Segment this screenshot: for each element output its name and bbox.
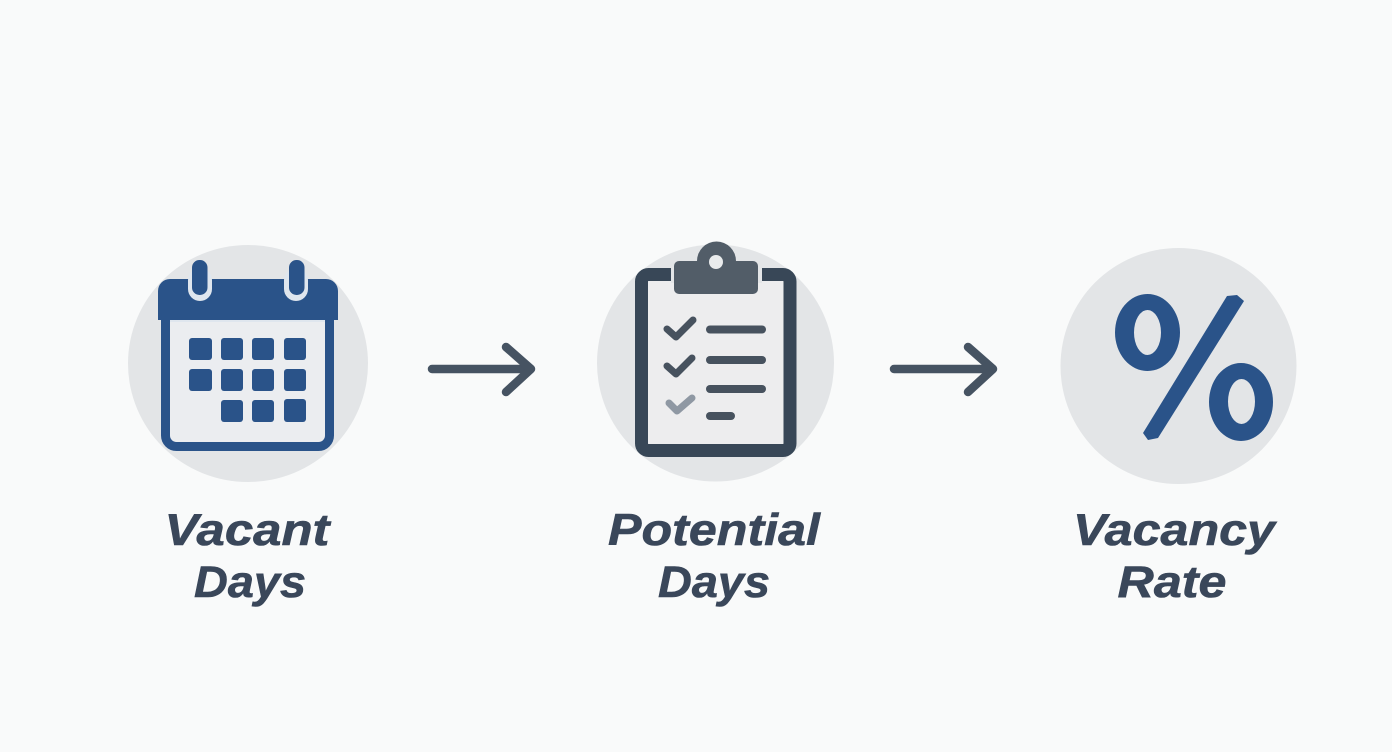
step: vacant days: [128, 245, 368, 607]
icon circle: percent background: [1060, 248, 1296, 484]
label: Potential Days: [608, 506, 822, 607]
label: Vacancy Rate: Vacancy: [1073, 506, 1278, 555]
icon circle: clipboard background: [597, 244, 834, 482]
step: potential days: [597, 242, 834, 607]
icon circle: calendar background: [128, 245, 368, 482]
arrow: second: [894, 347, 993, 392]
arrow: first: [432, 347, 531, 392]
label: Vacant Days: Vacant: [164, 506, 332, 555]
icon: calendar: [158, 260, 338, 446]
label: Vacant Days: Days: [194, 558, 306, 607]
label: Vacancy Rate: Rate: [1118, 558, 1226, 607]
label: Vacant Days: [164, 506, 332, 607]
icon: clipboard: [642, 242, 790, 450]
step: vacancy rate: [1060, 248, 1296, 607]
label: Vacancy Rate: [1073, 506, 1278, 607]
icon: percent sign: [1115, 294, 1273, 441]
label: Potential Days: Potential: [608, 506, 822, 555]
label: Potential Days: Days: [658, 558, 770, 607]
